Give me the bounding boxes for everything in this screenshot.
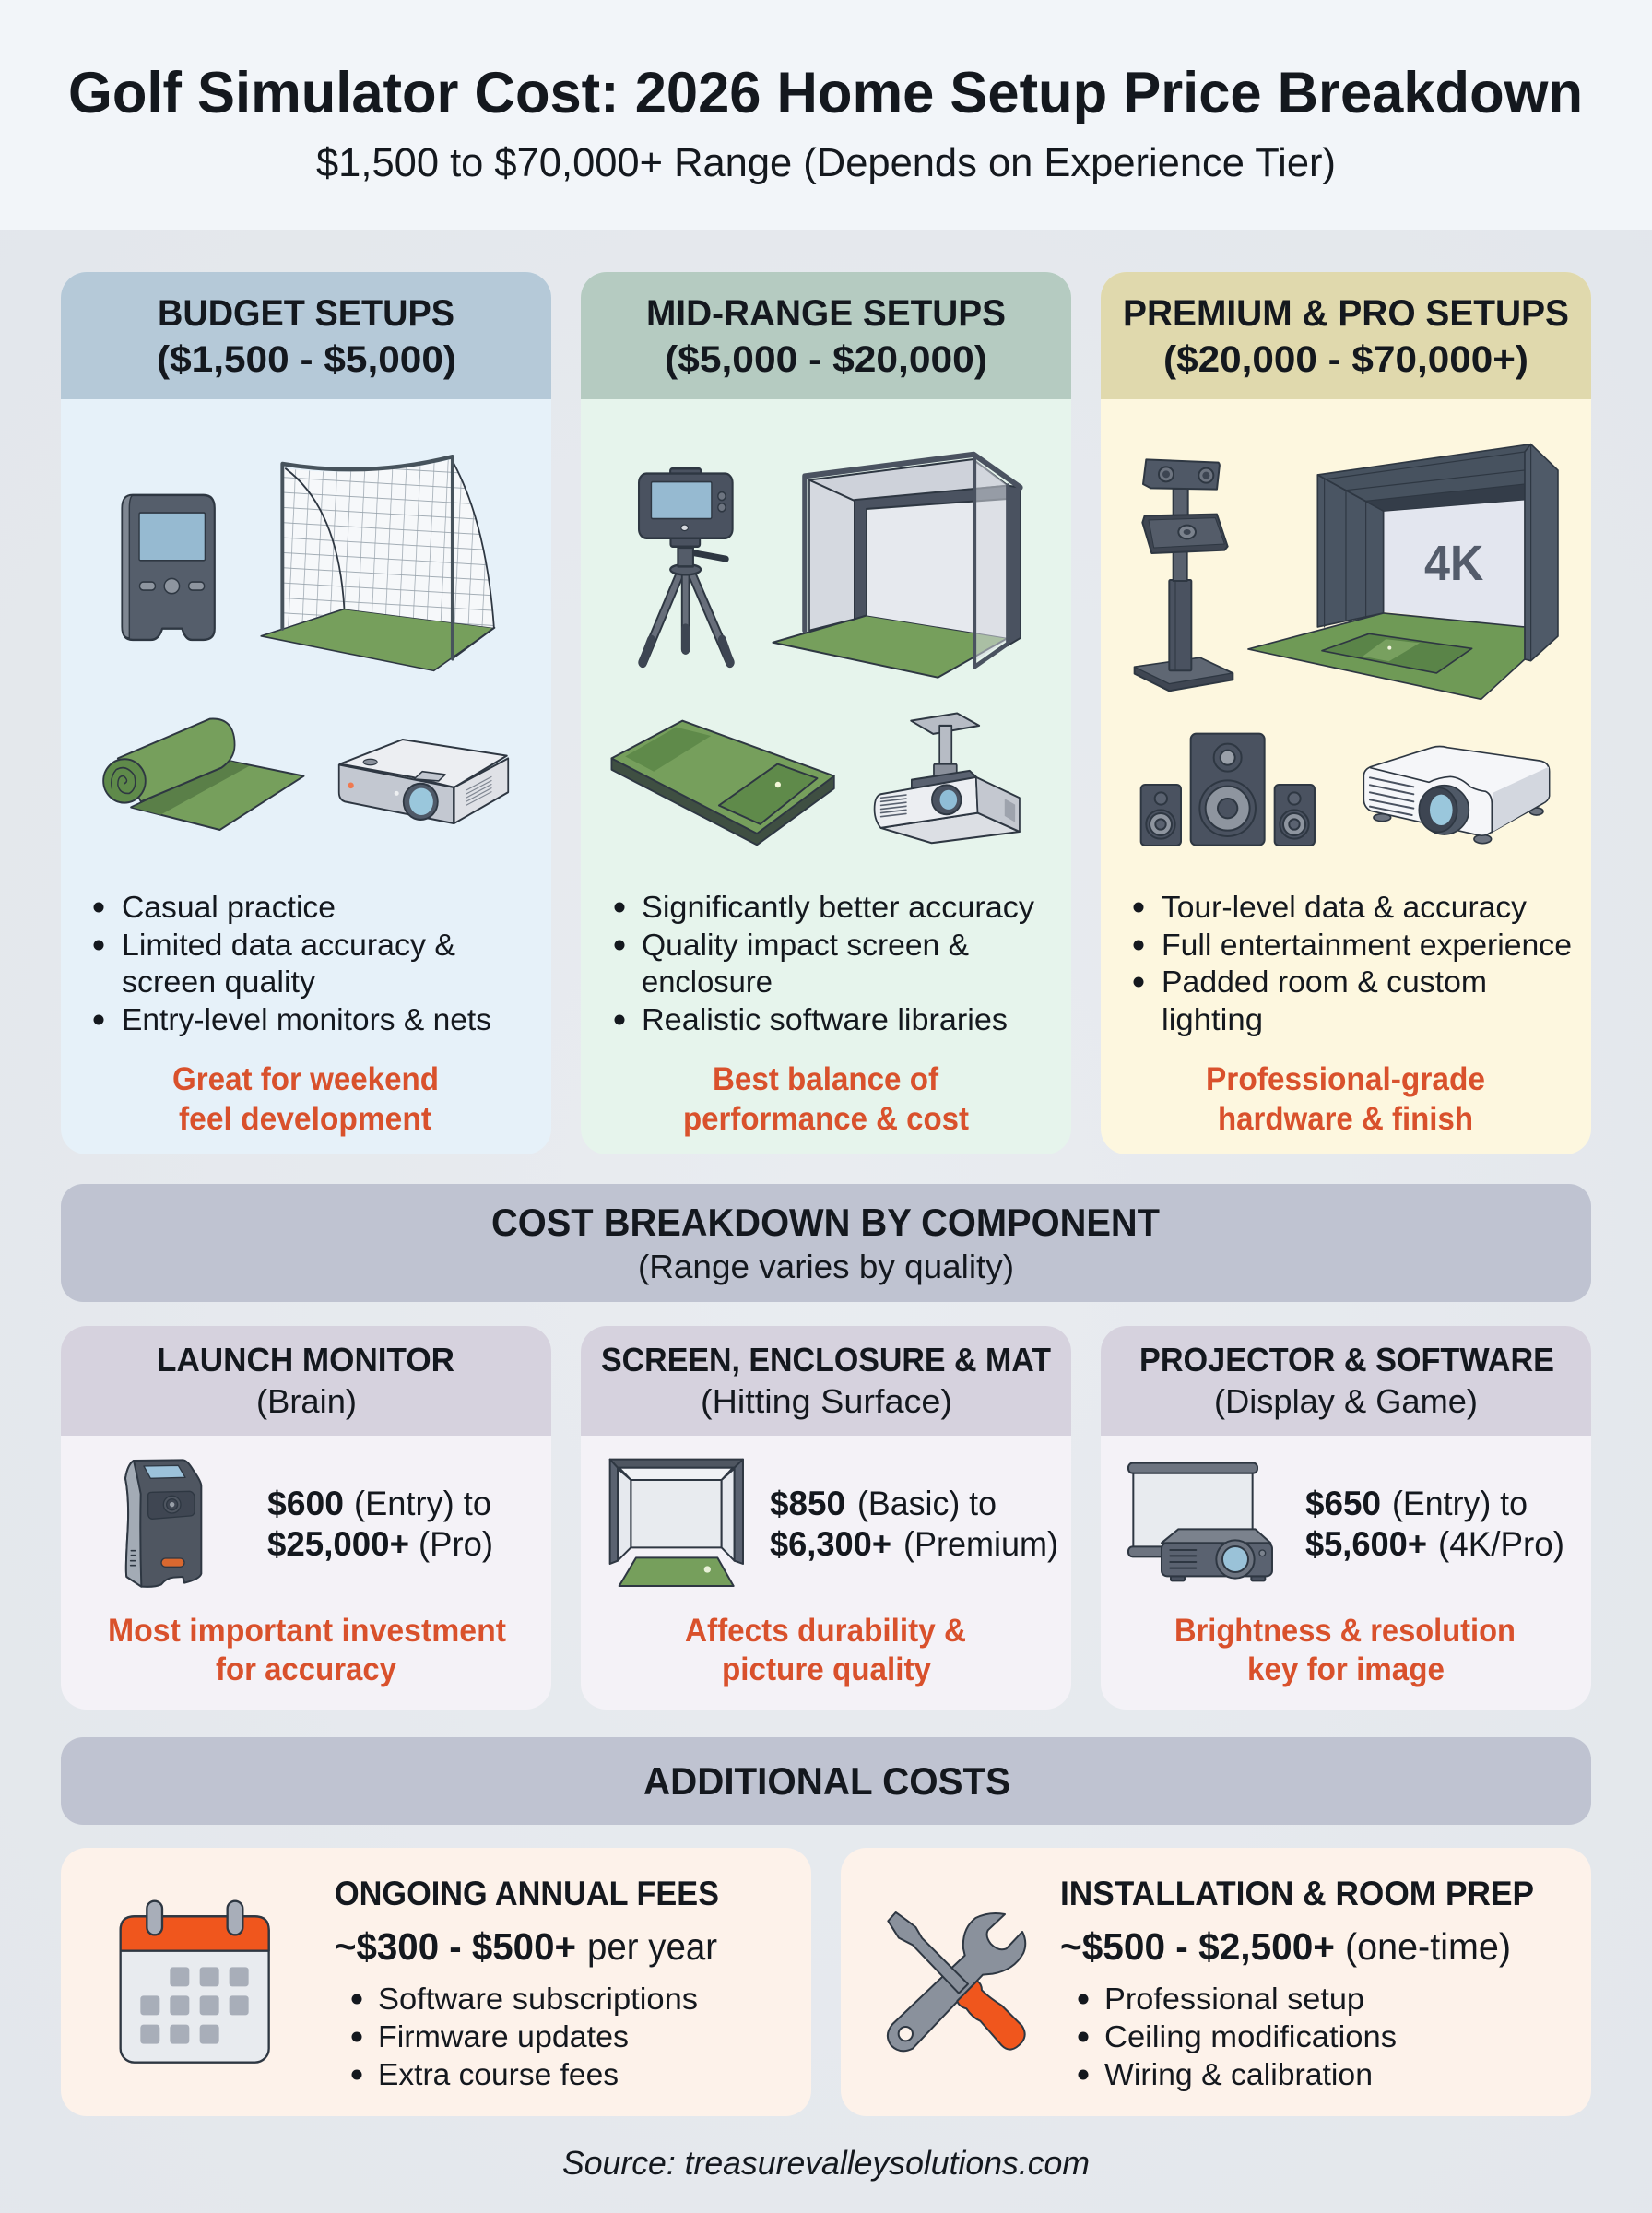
section band: additional costs: [61, 1737, 1591, 1825]
icon: hitting net: [261, 456, 495, 670]
callout: launch monitor: [108, 1613, 506, 1687]
callout: screen: picture quality: [722, 1651, 931, 1687]
price: screen: (Basic) to: [857, 1485, 997, 1522]
price: projector: $5,600+: [1305, 1525, 1427, 1563]
price: launch monitor: (Pro): [419, 1525, 493, 1563]
callout: launch monitor: for accuracy: [216, 1651, 397, 1687]
bullet list: mid-range: enclosure: [642, 964, 773, 999]
icon: overhead camera stand: [1135, 459, 1233, 691]
callout: mid-range: performance & cost: [683, 1101, 969, 1137]
icon: wrench and screwdriver: [888, 1912, 1025, 2051]
text: installation: Ceiling modifications: [1104, 2019, 1397, 2053]
price: projector: [1305, 1485, 1564, 1563]
price: launch monitor: $600: [267, 1485, 344, 1522]
text: annual fees: Firmware updates: [378, 2019, 629, 2053]
panel: projector and software: [1101, 1326, 1591, 1710]
price: projector: (4K/Pro): [1438, 1525, 1564, 1563]
bullet list: premium: [1134, 890, 1572, 1036]
callout: projector: key for image: [1247, 1651, 1445, 1687]
heading: projector: PROJECTOR & SOFTWARE: [1139, 1341, 1554, 1379]
source line: Source: treasurevalleysolutions.com: [562, 2144, 1090, 2182]
heading: budget: [157, 293, 456, 380]
text: annual fees: [335, 1875, 719, 2091]
icon: ceiling-mounted projector: [875, 713, 1020, 843]
price: launch monitor: [267, 1485, 493, 1563]
icon: calendar: [121, 1901, 269, 2063]
heading: budget: BUDGET SETUPS: [158, 293, 454, 334]
text: installation: Wiring & calibration: [1104, 2057, 1373, 2091]
price: screen: $6,300+: [770, 1525, 891, 1563]
callout: mid-range: Best balance of: [713, 1061, 938, 1097]
icon: projector and screen: [1128, 1463, 1272, 1580]
callout: budget: feel development: [179, 1101, 431, 1137]
bullet list: premium: lighting: [1162, 1002, 1263, 1036]
icon: speakers: [1141, 734, 1315, 846]
heading: premium: [1123, 293, 1569, 380]
section band: additional costs: ADDITIONAL COSTS: [643, 1759, 1010, 1803]
bullet list: budget: Limited data accuracy &: [122, 928, 455, 962]
callout: premium: Professional-grade: [1206, 1061, 1485, 1097]
text: installation: INSTALLATION & ROOM PREP: [1060, 1875, 1534, 1912]
callout: premium: hardware & finish: [1218, 1101, 1473, 1137]
callout: mid-range: [683, 1061, 969, 1137]
bullet list: mid-range: Realistic software libraries: [642, 1002, 1008, 1036]
text: installation: Professional setup: [1104, 1982, 1364, 2016]
price: launch monitor: $25,000+: [267, 1525, 409, 1563]
heading: launch monitor: (Brain): [256, 1382, 357, 1420]
panel: ongoing annual fees: [61, 1848, 811, 2116]
heading: launch monitor: LAUNCH MONITOR: [157, 1341, 454, 1379]
bullet list: budget: [94, 890, 491, 1036]
panel: budget setups: [61, 272, 551, 1154]
heading: launch monitor: [157, 1341, 454, 1420]
text: annual fees: ONGOING ANNUAL FEES: [335, 1875, 719, 1912]
section band: cost breakdown by component: (Range varies by quality): [638, 1248, 1014, 1285]
icon: launch monitor: [125, 1460, 201, 1587]
price: screen: [770, 1485, 1058, 1563]
text: installation: [1060, 1875, 1534, 2091]
bullet list: mid-range: [614, 890, 1035, 1036]
heading: premium: PREMIUM & PRO SETUPS: [1123, 293, 1569, 334]
bullet list: premium: Padded room & custom: [1162, 964, 1487, 999]
callout: budget: Great for weekend: [172, 1061, 439, 1097]
heading: mid-range: ($5,000 - $20,000): [665, 339, 987, 380]
section band: cost breakdown by component: [61, 1184, 1591, 1302]
text: annual fees: ~$300 - $500+: [335, 1925, 576, 1968]
bullet list: budget: screen quality: [122, 964, 316, 999]
heading: screen: [601, 1341, 1051, 1420]
panel: mid-range setups: [581, 272, 1071, 1154]
heading: budget: ($1,500 - $5,000): [157, 339, 456, 380]
heading: screen: SCREEN, ENCLOSURE & MAT: [601, 1341, 1051, 1379]
bullet list: budget: Entry-level monitors & nets: [122, 1002, 491, 1036]
price: screen: (Premium): [903, 1525, 1058, 1563]
price: projector: (Entry) to: [1392, 1485, 1528, 1522]
text: annual fees: Extra course fees: [378, 2057, 619, 2091]
heading: mid-range: MID-RANGE SETUPS: [646, 293, 1006, 334]
bullet list: premium: Tour-level data & accuracy: [1162, 890, 1527, 924]
icon: rolled turf: [103, 718, 304, 830]
price: launch monitor: (Entry) to: [354, 1485, 491, 1522]
icon: camera on tripod: [639, 468, 733, 662]
icon: screen and mat: [610, 1460, 743, 1586]
icon: premium projector: [1363, 746, 1550, 844]
panel: screen, enclosure and mat: [581, 1326, 1071, 1710]
callout: projector: Brightness & resolution: [1174, 1613, 1516, 1649]
price: projector: $650: [1305, 1485, 1381, 1522]
heading: projector: [1139, 1341, 1554, 1420]
header banner: [0, 0, 1652, 230]
callout: premium: [1206, 1061, 1485, 1137]
text: installation: (one-time): [1345, 1925, 1511, 1968]
icon: premium enclosure with 4K screen: [1248, 444, 1558, 699]
text: annual fees: per year: [587, 1925, 717, 1968]
panel: installation and room prep: [841, 1848, 1591, 2116]
icon: budget projector: [339, 740, 508, 823]
bullet list: mid-range: Quality impact screen &: [642, 928, 969, 962]
icon: simulator enclosure: [773, 455, 1021, 678]
text: installation: ~$500 - $2,500+: [1060, 1925, 1335, 1968]
callout: screen: [685, 1613, 966, 1687]
title: Golf Simulator Cost: 2026 Home Setup Price Breakdown: [68, 61, 1583, 125]
price: screen: $850: [770, 1485, 845, 1522]
heading: screen: (Hitting Surface): [701, 1382, 952, 1420]
section band: cost breakdown by component: COST BREAKDOWN BY COMPONENT: [491, 1201, 1160, 1244]
text: annual fees: Software subscriptions: [378, 1982, 698, 2016]
callout: budget: [172, 1061, 439, 1137]
callout: projector: [1174, 1613, 1516, 1687]
callout: screen: Affects durability &: [685, 1613, 966, 1649]
callout: launch monitor: Most important investment: [108, 1613, 506, 1649]
label: 4K: 4K: [1424, 537, 1483, 591]
icon: hitting mat: [611, 721, 834, 845]
icon: handheld launch monitor: [122, 495, 215, 640]
heading: premium: ($20,000 - $70,000+): [1163, 339, 1528, 380]
heading: mid-range: [646, 293, 1006, 380]
bullet list: budget: Casual practice: [122, 890, 336, 924]
panel: launch monitor: [61, 1326, 551, 1710]
panel: premium and pro setups: [1101, 272, 1591, 1154]
subtitle: $1,500 to $70,000+ Range (Depends on Experience Tier): [316, 140, 1336, 185]
bullet list: mid-range: Significantly better accuracy: [642, 890, 1035, 924]
heading: projector: (Display & Game): [1214, 1382, 1478, 1420]
bullet list: premium: Full entertainment experience: [1162, 928, 1572, 962]
